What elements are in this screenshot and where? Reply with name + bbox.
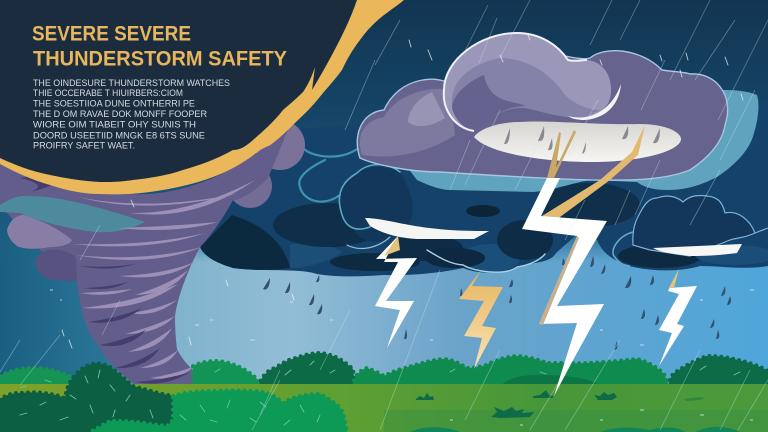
tornado funnel [0, 120, 305, 394]
main lightning bolt [522, 178, 607, 396]
panel background [0, 0, 357, 182]
right lightning bolt [659, 269, 697, 366]
purple back cloud [357, 51, 728, 180]
title [32, 22, 287, 70]
tornado light streaks [72, 180, 255, 391]
title: THUNDERSTORM SAFETY [33, 48, 287, 70]
body text: WIORE OIM TIABEIT OHY SUNIS TH [33, 118, 196, 130]
falling dark raindrops [263, 256, 731, 350]
body text: THE D OM RAVAE DOK MONFF FOOPER [33, 108, 207, 119]
lightning fork inside main cloud [542, 125, 645, 220]
cloud white outline [444, 33, 587, 131]
tornado lobes [255, 120, 305, 170]
yellow swoosh with lightning notch [0, 0, 404, 194]
white cloud wedges [365, 218, 742, 256]
drops inside the oval [504, 126, 660, 154]
tornado teal inner [0, 196, 145, 232]
small cloud outlines, teal [299, 145, 545, 272]
body text [33, 77, 230, 150]
tornado lighter left lobe [7, 215, 72, 249]
white crescent [568, 84, 621, 120]
small right cloud with outline [613, 196, 768, 266]
bush leaf flecks [20, 361, 740, 425]
back row of bushes [0, 353, 768, 390]
main storm cloud [357, 33, 758, 192]
tornado body [0, 125, 290, 394]
body text: THE OINDESURE THUNDERSTORM WATCHES [33, 77, 230, 88]
light blue under-layer [407, 90, 758, 192]
short bright rain flecks [62, 35, 743, 348]
grass field [0, 384, 768, 432]
white oval underside [474, 122, 681, 162]
tan lightning bolt [459, 269, 503, 369]
title panel [0, 0, 404, 194]
body text: DOORD USEETIID MNGK E8 6TS SUNE [33, 130, 205, 140]
dark storm cloud bank [200, 100, 768, 276]
grass tufts [416, 390, 705, 418]
tornado dark streaks [20, 170, 190, 384]
foreground bushes [0, 363, 740, 432]
title: SEVERE SEVERE [32, 22, 191, 46]
left lightning bolt [375, 236, 417, 348]
front cloud puff [444, 33, 611, 131]
body text: PROIFRY SAFET WAET. [33, 140, 135, 150]
body text: THIE OCCERABE T HIUIRBERS:CIOM [33, 87, 183, 98]
tornado darker lower lobe [35, 249, 77, 281]
cloud lighter lobes at left [360, 89, 455, 156]
body text: THE SOESTIIOA DUNE ONTHERRI PE [33, 98, 195, 108]
speckle droplets [50, 290, 754, 425]
